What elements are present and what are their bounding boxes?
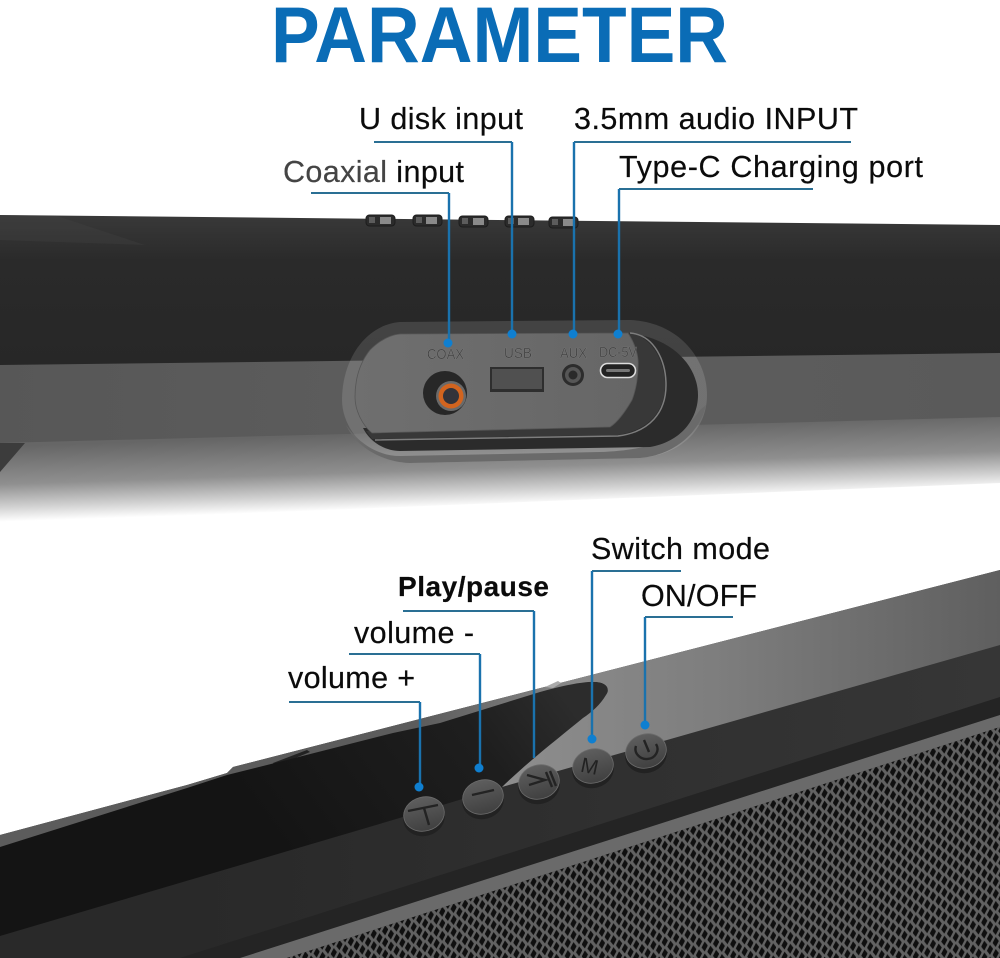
panel recess inner wall — [366, 333, 665, 439]
panel plate — [355, 333, 638, 433]
panel bezel lower — [346, 405, 706, 463]
callout: U disk input — [359, 102, 524, 338]
bar fade reflection — [0, 415, 1000, 523]
button mode — [568, 744, 618, 793]
callout: U disk input: U disk input — [359, 102, 524, 136]
bar top face — [502, 570, 1000, 787]
USB-C port — [600, 364, 636, 378]
callout: Type-C Charging port: Type-C Charging port — [619, 150, 924, 184]
port panel — [342, 320, 707, 463]
callout: 3.5mm audio INPUT — [568, 102, 858, 338]
callout: 3.5mm audio INPUT: 3.5mm audio INPUT — [574, 102, 858, 136]
bar dark upper body — [0, 215, 1000, 366]
top small buttons — [366, 215, 578, 228]
button play/pause — [514, 760, 564, 809]
callout: ON/OFF: ON/OFF — [641, 579, 757, 613]
panel recess — [363, 333, 698, 451]
control buttons — [399, 729, 671, 841]
label AUX: AUX — [560, 346, 587, 362]
bar lower left wedge — [0, 443, 25, 472]
callout: Coaxial input: Coaxial input — [283, 155, 465, 189]
button mode: M — [579, 754, 600, 780]
callout: volume + — [288, 661, 424, 792]
callout: ON/OFF — [640, 579, 757, 730]
callout: volume +: volume + — [288, 661, 415, 695]
panel lip — [375, 333, 666, 440]
button power — [621, 729, 671, 778]
soundbar: rear view — [0, 215, 1000, 523]
callout: Play/pause: Play/pause — [398, 571, 549, 602]
bar rear nub — [545, 681, 561, 688]
speaker grille — [287, 727, 1000, 958]
callout: Type-C Charging port — [614, 150, 924, 338]
label DC-5V: DC-5V — [599, 345, 637, 361]
coaxial jack — [423, 371, 467, 415]
button volume + — [399, 792, 449, 841]
bar front strip — [240, 715, 1000, 958]
callout: volume -: volume - — [354, 616, 474, 650]
USB port — [490, 367, 544, 392]
soundbar: front view — [0, 570, 1000, 958]
callout: Switch mode: Switch mode — [591, 532, 770, 566]
bar body — [0, 570, 1000, 958]
panel outer bezel — [342, 320, 707, 463]
label COAX: COAX — [427, 347, 464, 363]
callout: Coaxial input — [283, 155, 465, 348]
button volume - — [458, 775, 508, 824]
callout: volume - — [349, 616, 484, 772]
AUX jack — [562, 364, 584, 386]
bar rear slot — [273, 750, 310, 766]
bar lighter wedge — [0, 215, 145, 245]
bar dark shadow recess — [0, 682, 608, 936]
bar top edge band — [0, 673, 610, 849]
bar middle gray band — [0, 353, 1000, 443]
label USB: USB — [504, 346, 532, 362]
callout: Switch mode — [588, 532, 770, 744]
bar lower dark band — [180, 697, 1000, 958]
